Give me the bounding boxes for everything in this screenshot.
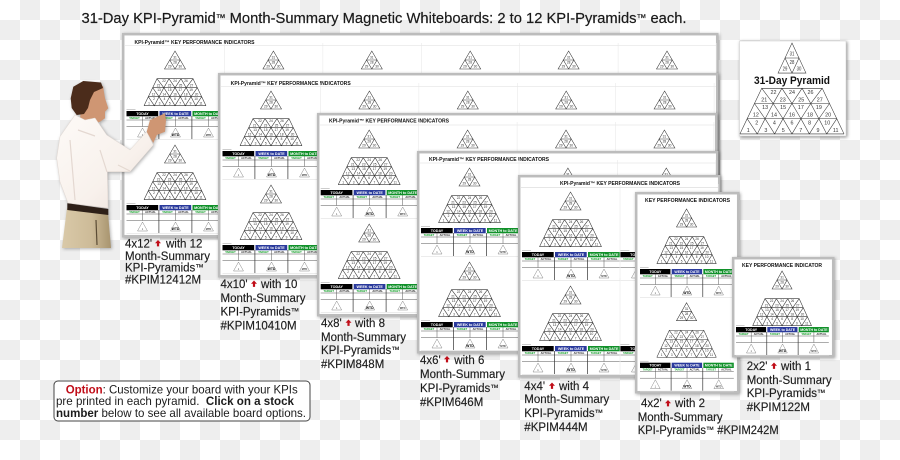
label: 4x2 board: 4x2' — [641, 398, 662, 410]
label: 2x2 board: KPI-Pyramids — [747, 388, 817, 400]
panel: 4x2 whiteboard: KEY PERFORMANCE INDICATORS — [645, 198, 731, 204]
title: ™ — [637, 13, 646, 24]
callout: customization option: Option: Customize your board with your KPIs — [66, 384, 298, 396]
panel: 31-day pyramid legend — [740, 41, 846, 136]
label: 4x8 board: 4x8' — [321, 318, 342, 330]
label: 4x6 board: ™ — [490, 382, 499, 392]
belt — [67, 203, 108, 215]
title: each. — [646, 10, 686, 27]
label: 4x6 board: 4x6' — [420, 355, 441, 367]
label: 4x4 board: #KPIM444M — [524, 422, 588, 434]
label: 4x6 board — [420, 355, 505, 409]
hair — [71, 81, 103, 115]
title: Month-Summary Magnetic Whiteboards: 2 to 12 KPI-Pyramids — [226, 10, 637, 27]
shirt — [57, 115, 153, 208]
label: 4x10 board — [220, 279, 306, 332]
panel: 2x2 whiteboard — [733, 258, 833, 356]
label: 4x6 board: KPI-Pyramids — [420, 383, 490, 395]
label: 4x8 board: ™ — [391, 344, 400, 354]
label: 2x2 board: with 1 — [780, 361, 811, 373]
label: 4x6 board: with 6 — [453, 355, 484, 367]
neck and face — [80, 86, 108, 124]
pointing hand — [147, 113, 166, 143]
label: 4x12 board: 4x12' — [125, 238, 152, 250]
label: 4x8 board: KPI-Pyramids — [321, 345, 391, 357]
label: 4x8 board: #KPIM848M — [321, 359, 384, 371]
panel: 4x4 whiteboard: KPI-Pyramid™ KEY PERFORMANCE INDICATORS — [560, 181, 681, 187]
label: 4x8 board: with 8 — [354, 318, 385, 330]
label: 4x2 board: #KPIM242M — [714, 425, 779, 437]
label: 4x2 board: KPI-Pyramids — [638, 425, 708, 437]
panel: 2x2 whiteboard: KEY PERFORMANCE INDICATOR — [742, 263, 822, 269]
label: 2x2 board: Month-Summary — [747, 375, 832, 387]
title: ™ — [216, 13, 226, 24]
panel: 31-day pyramid legend: 31-Day Pyramid — [754, 75, 830, 87]
panel: 4x8 whiteboard: KPI-Pyramid™ KEY PERFORMANCE INDICATORS — [329, 118, 450, 124]
panel: 4x8 whiteboard — [318, 114, 716, 315]
panel: 4x6 whiteboard: KPI-Pyramid™ KEY PERFORMANCE INDICATORS — [429, 157, 550, 163]
label: 4x10 board: #KPIM10410M — [220, 320, 297, 332]
callout: customization option — [54, 381, 310, 421]
label: 4x2 board — [638, 398, 779, 437]
panel: 4x6 whiteboard — [418, 152, 717, 352]
label: 4x4 board: ™ — [595, 408, 603, 418]
label: 2x2 board: 2x2' — [747, 361, 767, 373]
trousers — [62, 208, 111, 248]
label: 4x2 board: ™ — [706, 424, 714, 434]
presenter figure — [57, 81, 166, 248]
label: 4x12 board: with 12 — [165, 238, 202, 250]
label: 4x10 board: 4x10' — [220, 279, 248, 291]
panel: 4x4 whiteboard — [519, 176, 719, 376]
panel: 4x2 whiteboard — [636, 193, 738, 392]
label: 4x4 board: Month-Summary — [524, 394, 610, 406]
label: 4x4 board: 4x4' — [524, 381, 545, 393]
label: 4x6 board: Month-Summary — [420, 369, 505, 381]
label: 4x4 board: KPI-Pyramids — [524, 408, 595, 420]
label: 4x12 board: KPI-Pyramids — [125, 262, 195, 274]
label: 4x10 board: with 10 — [260, 279, 297, 291]
label: 4x12 board: Month-Summary — [125, 251, 210, 263]
panel: 4x12 whiteboard — [123, 34, 717, 236]
label: 4x2 board: Month-Summary — [638, 412, 723, 424]
panel: 4x10 whiteboard: KPI-Pyramid™ KEY PERFORMANCE INDICATORS — [231, 81, 351, 87]
label: 4x2 board: with 2 — [674, 398, 705, 410]
panel: 4x12 whiteboard: KPI-Pyramid™ KEY PERFORMANCE INDICATORS — [134, 40, 255, 46]
label: 2x2 board — [747, 361, 832, 414]
label: 2x2 board: ™ — [817, 388, 825, 398]
callout: customization option: pre printed in each pyramid. Click on a stock — [56, 395, 295, 408]
label: 4x4 board — [524, 381, 610, 434]
label: 4x10 board: KPI-Pyramids — [220, 306, 291, 318]
panel: 4x10 whiteboard — [219, 74, 717, 276]
label: 4x10 board: ™ — [291, 306, 299, 316]
label: 4x12 board — [125, 238, 210, 286]
label: 2x2 board: #KPIM122M — [747, 402, 810, 414]
title: 31-Day KPI-Pyramid — [82, 10, 218, 27]
label: 4x10 board: Month-Summary — [220, 293, 306, 305]
label: 4x12 board: #KPIM12412M — [125, 274, 201, 286]
label: 4x6 board: #KPIM646M — [420, 397, 483, 409]
callout: customization option: number below to see all available board options. — [56, 407, 306, 420]
label: 4x4 board: with 4 — [558, 381, 590, 393]
label: 4x8 board — [321, 318, 406, 371]
label: 4x12 board: ™ — [195, 262, 204, 272]
label: 4x8 board: Month-Summary — [321, 332, 406, 344]
